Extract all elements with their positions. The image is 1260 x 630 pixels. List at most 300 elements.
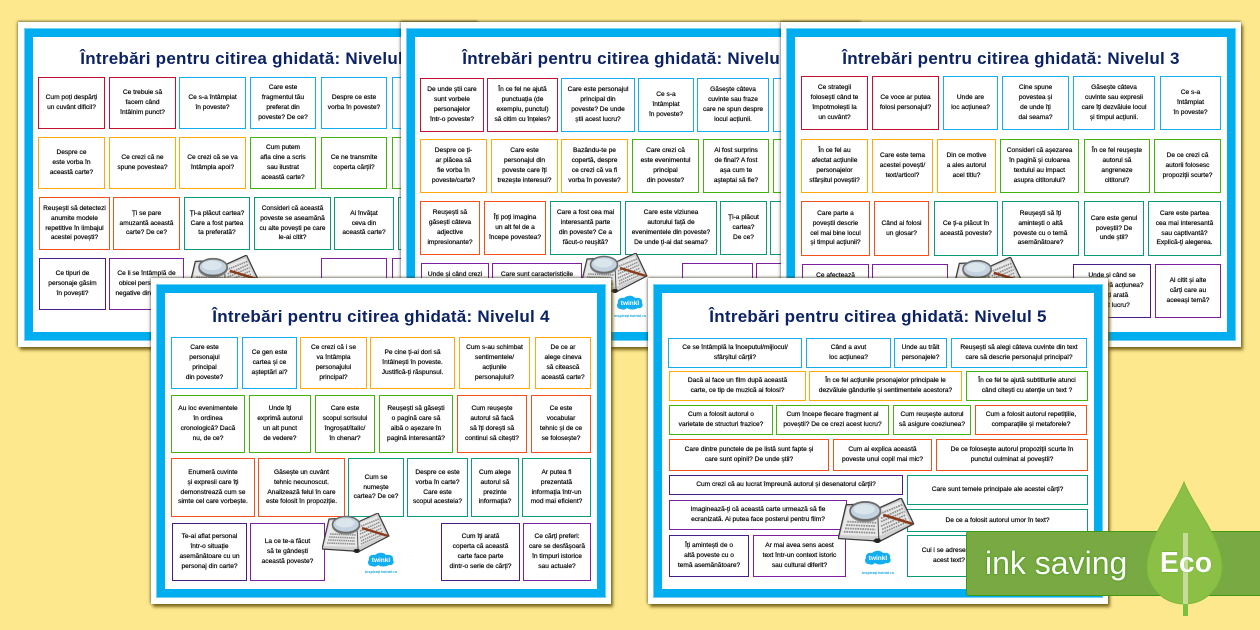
card red	[420, 78, 484, 132]
card teal: le-ai citit?	[279, 234, 306, 241]
card green	[1000, 139, 1079, 193]
card teal	[1148, 201, 1221, 256]
icon: open book with magnifier	[190, 255, 258, 278]
card purple	[1155, 264, 1221, 318]
card green: Care este	[331, 405, 359, 412]
card blue	[668, 338, 802, 368]
card orange: Bazându-te pe	[573, 147, 616, 154]
card purple	[669, 475, 903, 495]
card purple	[109, 258, 184, 310]
card orange-red: Enumeră cuvinte	[188, 469, 238, 476]
card teal: Explică-ți alegerea.	[1156, 239, 1213, 246]
card teal: ceva din	[352, 220, 376, 227]
card teal	[334, 197, 394, 250]
card orange: Care este	[510, 147, 539, 154]
card teal: cartea? De ce?	[354, 493, 398, 500]
card red: să citim cu înțeles?	[494, 116, 551, 123]
card blue	[638, 78, 694, 132]
card purple: sau actuale?	[538, 563, 576, 570]
card orange: Ce crezi că se va	[187, 154, 238, 161]
card teal	[407, 458, 468, 517]
card red	[487, 78, 558, 132]
card teal: Ți-a plăcut	[728, 214, 759, 221]
card green: așteptai să fie?	[714, 177, 758, 184]
icon: open book with magnifier	[322, 513, 390, 553]
icon: open book with magnifier	[838, 498, 914, 543]
card orange: poveste care îți	[502, 167, 547, 174]
card orange: dezvăluie gândurile și sentimentele acestora?	[819, 387, 952, 394]
card orange: Despre ce ți-	[435, 147, 472, 154]
card teal: prezentată	[541, 479, 572, 486]
card orange-red: un glosar?	[886, 230, 917, 236]
card blue: care să descrie personajul principal?	[965, 354, 1072, 361]
card orange: În ce fel acțiunile prsonajelor principale le	[825, 377, 946, 384]
card green: în ordinea	[193, 415, 223, 422]
card orange-red: acestei povești?	[51, 234, 98, 241]
card orange: acestei povești/	[880, 162, 925, 169]
card orange	[420, 139, 487, 193]
card teal: Care a fost partea	[191, 220, 243, 227]
card orange: va întâmpla	[316, 354, 351, 361]
card orange	[300, 337, 367, 389]
card teal: această carte?	[342, 229, 386, 236]
card teal: Consideri că această	[262, 205, 323, 212]
card green	[249, 395, 311, 453]
card red: un cuvânt dificil?	[47, 104, 96, 111]
card purple: text într-un context istoric	[763, 552, 836, 559]
card blue: Ce gen este	[252, 349, 287, 356]
card blue: Când a avut	[831, 344, 866, 351]
card teal	[770, 201, 830, 255]
card teal: numește	[363, 484, 389, 491]
card red: într-o poveste?	[430, 116, 474, 123]
card orange-red: autorul să facă	[470, 415, 514, 422]
card green: Cum reușește autorul	[900, 411, 964, 418]
card blue: poveste? De unde	[571, 106, 625, 113]
card teal	[398, 197, 458, 250]
card teal	[907, 509, 1088, 532]
card green: Ce ne transmite	[331, 154, 377, 161]
card purple: carte face parte	[458, 553, 503, 560]
logo caption: inspirați twinkl.ro	[365, 569, 397, 574]
card teal: Cum se	[365, 474, 387, 481]
card orange: fie vorba în	[437, 167, 470, 174]
card purple: personaje găsim	[48, 280, 97, 287]
card purple: ecranizată. Ai putea face posterul pentru film?	[691, 516, 825, 523]
card orange: copertă, despre	[572, 157, 617, 164]
card purple: negative din povești?	[116, 290, 177, 297]
card green: Cum a folosit autorul o	[688, 411, 754, 418]
card teal: Care este partea	[1160, 210, 1209, 217]
card orange: alege cineva	[544, 354, 582, 361]
banner text: ink saving	[985, 545, 1127, 581]
card blue: Găsește câteva	[710, 86, 756, 93]
card green: De ce crezi că	[1167, 152, 1208, 159]
card teal: Care a fost cea mai	[557, 209, 614, 216]
card green	[1084, 139, 1150, 193]
card blue: fragmentul tău	[262, 94, 304, 101]
card red: folosi personajul?	[880, 104, 931, 111]
panel: sheet level 5	[648, 278, 1108, 604]
card orange	[535, 337, 591, 389]
card orange: Despre ce	[56, 149, 87, 156]
card orange: personajului?	[475, 374, 514, 381]
heading: level 3 title: Întrebări pentru citirea ghidată: Nivelul 3	[842, 49, 1180, 68]
card blue	[171, 337, 238, 389]
banner: ink saving	[966, 531, 1260, 596]
card purple: Ar mai avea sens acest	[765, 542, 834, 549]
card purple: personajelor	[817, 292, 854, 299]
card orange	[459, 337, 530, 389]
card blue: Care este	[190, 344, 219, 351]
card purple	[872, 264, 948, 318]
card purple: sau cultural diferit?	[772, 562, 827, 569]
card blue: care îți dezvăluie locul	[1082, 104, 1146, 111]
card purple: dintr-o serie de cărți?	[450, 563, 511, 570]
card teal: unde știi?	[1100, 234, 1128, 241]
card orange-red: Reușești să detectezi	[43, 205, 106, 212]
card blue: întâmplat	[652, 101, 680, 108]
card orange: a ales autorul	[947, 162, 986, 169]
card orange-red	[457, 395, 527, 453]
card purple: Ce cărți preferi:	[534, 533, 580, 540]
card purple: personajului	[519, 281, 555, 288]
card orange-red	[484, 201, 546, 255]
card blue: personajul	[189, 354, 220, 361]
card blue: Găsește câteva	[1091, 84, 1137, 91]
card teal	[1084, 201, 1144, 256]
card orange: Dacă ai face un film după această	[688, 377, 787, 384]
card blue	[179, 77, 246, 129]
card orange	[809, 371, 962, 401]
card blue: dai seama?	[1018, 114, 1053, 121]
card green: principal	[653, 167, 678, 174]
card orange-red	[669, 439, 829, 471]
card green: o pagină care să	[392, 415, 440, 422]
card orange-red: vocabular	[547, 415, 575, 422]
card teal	[907, 475, 1088, 505]
card orange	[38, 137, 105, 189]
card teal: scopul acesteia?	[413, 498, 462, 505]
card purple: Îți amintești de o	[685, 542, 733, 549]
card red	[38, 77, 105, 129]
card blue: de unde îți	[1020, 104, 1051, 111]
card orange-red	[420, 201, 480, 255]
card orange-red	[975, 405, 1087, 435]
card purple: în povești?	[57, 290, 88, 297]
card blue	[697, 78, 769, 132]
card green: când citești cu atenție un text ?	[982, 387, 1072, 394]
card orange-red	[936, 439, 1088, 471]
card purple	[421, 263, 489, 317]
card blue: Ce s-a	[656, 91, 676, 98]
card orange-red: tehnic și de ce	[540, 425, 582, 432]
card purple: personaj din carte?	[181, 563, 238, 570]
logo caption: inspirați twinkl.ro	[862, 570, 894, 575]
card blue: principal din	[580, 96, 616, 103]
card teal	[907, 535, 991, 577]
card purple: Ce îți arată	[1096, 292, 1128, 299]
card purple: care se desfășoară	[529, 543, 585, 550]
card blue: Care este	[269, 84, 297, 91]
card purple	[523, 523, 591, 581]
card purple	[250, 523, 325, 581]
card orange: sentimentele/	[475, 354, 514, 361]
card red: împotmolești la	[812, 104, 857, 111]
card purple: aceeași temă?	[1167, 297, 1209, 304]
card blue	[1073, 76, 1155, 130]
card teal: Ce ți-a plăcut în	[943, 220, 989, 227]
card orange-red	[171, 458, 255, 517]
icon: open book with magnifier	[955, 257, 1022, 278]
card purple	[802, 264, 869, 318]
card teal: interesantă parte	[561, 219, 610, 226]
card blue	[321, 77, 387, 129]
card orange-red: Cum reușește	[471, 405, 513, 412]
card blue: așteptări ai?	[252, 369, 287, 376]
card green: sau ilustrat	[267, 164, 299, 171]
card blue: preferat din	[266, 104, 300, 111]
card purple: coperta că această	[453, 543, 508, 550]
card teal: cu alte povești pe care	[260, 224, 325, 232]
card blue: Cine spune	[1019, 84, 1052, 91]
card teal: informația într-un	[532, 488, 581, 496]
card blue: și timpul acțiunii.	[1090, 114, 1138, 121]
icon: twinkl logo	[865, 550, 891, 565]
card blue	[773, 78, 833, 132]
card red: este folosit în propoziție.	[266, 498, 337, 505]
panel: sheet level 4	[151, 278, 611, 604]
card purple: cărți care au	[1170, 287, 1206, 294]
card blue	[806, 338, 891, 368]
card teal	[254, 197, 331, 250]
card green: pagină interesantă?	[387, 435, 445, 442]
card teal: Despre ce este	[415, 469, 460, 476]
card green	[315, 395, 375, 453]
card orange: trezește interesul?	[498, 177, 551, 184]
card teal: Care este genul	[1091, 215, 1137, 222]
card orange-red: De ce folosește autorul propoziții scurte în	[951, 446, 1073, 453]
card red: întâlnim punct?	[120, 109, 165, 116]
card purple: acest lucru?	[1094, 302, 1130, 309]
card orange: să citească	[546, 364, 579, 371]
card orange-red: Ce este	[550, 405, 572, 412]
card blue: Despre ce este	[332, 94, 376, 101]
card blue: Ce s-a întâmplat	[188, 94, 237, 101]
card orange-red: cel mai bine locul	[810, 230, 861, 236]
card blue	[392, 77, 459, 129]
card purple: în timpuri istorice	[532, 553, 582, 560]
card green	[171, 395, 245, 453]
card red	[258, 458, 345, 517]
card purple: principal?	[523, 291, 551, 298]
card blue: care ne spun despre	[703, 106, 763, 113]
card purple	[756, 263, 816, 317]
card orange-red: poveste unui copil mai mic?	[842, 456, 923, 463]
card green: Cum începe fiecare fragment al	[786, 411, 878, 418]
card teal: ta preferată?	[198, 229, 236, 236]
card blue: povestea și	[1019, 94, 1052, 101]
card green: este evenimentul	[641, 157, 690, 164]
card red: tehnic necunoscut.	[274, 479, 329, 486]
heading: level 2 title: Întrebări pentru citirea ghidată: Nivelul 2	[462, 49, 800, 68]
card red: În ce fel ne ajută	[498, 86, 547, 93]
card blue	[1160, 76, 1221, 130]
blue frame	[407, 29, 855, 340]
card green: cronologică? Dacă	[181, 425, 235, 432]
card purple: Unde și când se	[1088, 272, 1136, 279]
blue frame	[25, 29, 473, 340]
card red	[872, 76, 939, 130]
card purple	[39, 258, 106, 310]
card teal: făcut-o reușită?	[563, 239, 608, 246]
card teal: De ce?	[733, 234, 754, 241]
card purple: Cum îți arată	[462, 533, 499, 540]
card blue	[943, 76, 998, 130]
card blue: Care este personajul	[568, 86, 628, 93]
card blue: cartea și ce	[253, 359, 286, 366]
card red	[801, 76, 868, 130]
card orange: afectat acțiunile	[812, 157, 857, 164]
card green: nu, de ce?	[193, 435, 223, 442]
card green: de vedere?	[263, 435, 296, 442]
card orange: spune povestea?	[117, 164, 168, 171]
card green: un alt punct	[263, 425, 297, 432]
card blue: sfârșitul cărții?	[714, 354, 756, 361]
card purple: La ce te-a făcut	[265, 538, 310, 545]
card purple	[753, 535, 846, 577]
card purple	[669, 500, 847, 530]
card orange: text/articol?	[886, 172, 919, 179]
card blue: în poveste?	[1173, 109, 1208, 116]
icon: twinkl logo: twinkl	[621, 300, 639, 307]
card purple	[492, 263, 582, 317]
logo caption: inspirați twinkl.ro	[614, 313, 646, 318]
card orange-red: Reușești să	[433, 209, 467, 216]
card orange: vorba în poveste?	[568, 177, 621, 184]
card orange: ar plăcea să	[436, 157, 471, 164]
card orange	[669, 371, 806, 401]
card green: În ce fel reușește	[1092, 147, 1142, 154]
card orange: Cum s-au schimbat	[466, 344, 523, 351]
card green: varietate de structuri frazice?	[679, 421, 763, 428]
card orange: această carte?	[50, 169, 93, 176]
card teal	[1002, 201, 1079, 256]
card orange	[370, 337, 455, 389]
card orange-red: poveștii descrie	[813, 220, 858, 227]
card teal: Ar putea fi	[541, 469, 572, 476]
card teal: Ai învățat	[350, 210, 378, 217]
card teal: prezinte	[483, 488, 507, 496]
card green: cititorul?	[1105, 177, 1129, 184]
card green: exprimă autorul	[257, 415, 303, 422]
card red: De unde știi care	[427, 86, 477, 93]
card blue: Reușești să alegi câteva cuvinte din text	[960, 344, 1078, 351]
card green: în chenar?	[329, 435, 361, 442]
card teal	[522, 458, 591, 517]
card purple	[172, 523, 247, 581]
card orange-red: și expresii care îți	[188, 479, 238, 486]
card orange-red	[113, 197, 180, 250]
card purple: obicei personajelor	[119, 280, 174, 287]
card orange-red: găsești câteva	[429, 219, 471, 226]
heading: level 5 title: Întrebări pentru citirea ghidată: Nivelul 5	[709, 307, 1047, 326]
card teal: amintești o altă	[1018, 220, 1063, 227]
card purple: Imaginează-ți că această carte urmează să fie	[691, 506, 825, 513]
card blue: Unde are	[957, 94, 984, 101]
card purple	[392, 258, 459, 310]
card teal: poveste se aseamănă	[260, 215, 325, 222]
heading: level 4 title: Întrebări pentru citirea ghidată: Nivelul 4	[212, 307, 550, 326]
card green: aibă o așezare în	[391, 425, 441, 432]
card red: Ce voce ar putea	[880, 94, 931, 101]
card orange: această carte?	[541, 374, 585, 381]
card red	[109, 77, 176, 129]
card teal: cea mai interesantă	[1156, 220, 1213, 227]
card purple	[669, 535, 749, 577]
card blue: poveste? De ce?	[258, 114, 308, 121]
blue frame	[157, 285, 605, 597]
card blue: loc acțiunea?	[829, 354, 868, 361]
card blue: loc acțiunea?	[951, 104, 990, 111]
card teal: De unde ți-ai dat seama?	[634, 239, 708, 246]
card orange: carte, ce tip de muzică ai folosi?	[691, 387, 784, 394]
card blue: din poveste?	[186, 374, 223, 381]
card red: un cuvânt?	[818, 114, 851, 121]
card purple: Unde și când crezi	[428, 271, 482, 278]
card blue: întâmplat	[1177, 99, 1204, 106]
card green	[669, 405, 773, 435]
card orange: personajelor	[816, 167, 853, 174]
card purple: într-o situație	[190, 543, 229, 550]
card blue: în poveste?	[649, 111, 683, 118]
card green: de final? A fost	[715, 157, 757, 164]
card purple: desfășoară acțiunea?	[1080, 282, 1144, 289]
card green: afla cine a scris	[260, 154, 306, 161]
card orange-red: Când ai folosi	[882, 220, 921, 227]
card orange-red: adjective	[437, 229, 463, 236]
card orange: personajului	[316, 364, 351, 371]
card blue: în poveste?	[195, 104, 230, 111]
card blue: locul acțiunii.	[714, 116, 752, 123]
card blue: Ce s-a	[1181, 89, 1200, 96]
card purple	[1073, 264, 1151, 318]
icon: twinkl logo: twinkl	[869, 555, 887, 562]
card green: Reușești să găsești	[387, 405, 445, 412]
card green: această carte?	[261, 174, 305, 181]
card orange: De ce ar	[551, 344, 575, 351]
card orange-red	[39, 197, 110, 250]
card teal	[184, 197, 250, 250]
card teal: informația?	[479, 498, 511, 505]
card orange: Pe cine ți-ai dori să	[384, 349, 441, 356]
card purple: De unde știi?	[518, 301, 556, 308]
card orange-red: un alt fel de a	[495, 224, 535, 231]
card green	[893, 405, 971, 435]
card teal	[348, 458, 404, 517]
card blue: Unde au trăit	[902, 344, 939, 351]
card orange-red: punctul culminat al poveștii?	[971, 456, 1053, 463]
icon: eco leaf	[1146, 480, 1222, 616]
card purple	[321, 258, 387, 310]
card green	[392, 137, 459, 189]
card orange: Ce crezi că ne	[121, 154, 164, 161]
card orange-red: începe povestea?	[489, 234, 541, 241]
card teal: vorba în carte?	[416, 479, 459, 486]
card red: personajelor	[434, 106, 470, 113]
card teal: autorului față de	[647, 219, 695, 226]
card orange-red: care sunt opinii? De unde știi?	[705, 456, 793, 463]
